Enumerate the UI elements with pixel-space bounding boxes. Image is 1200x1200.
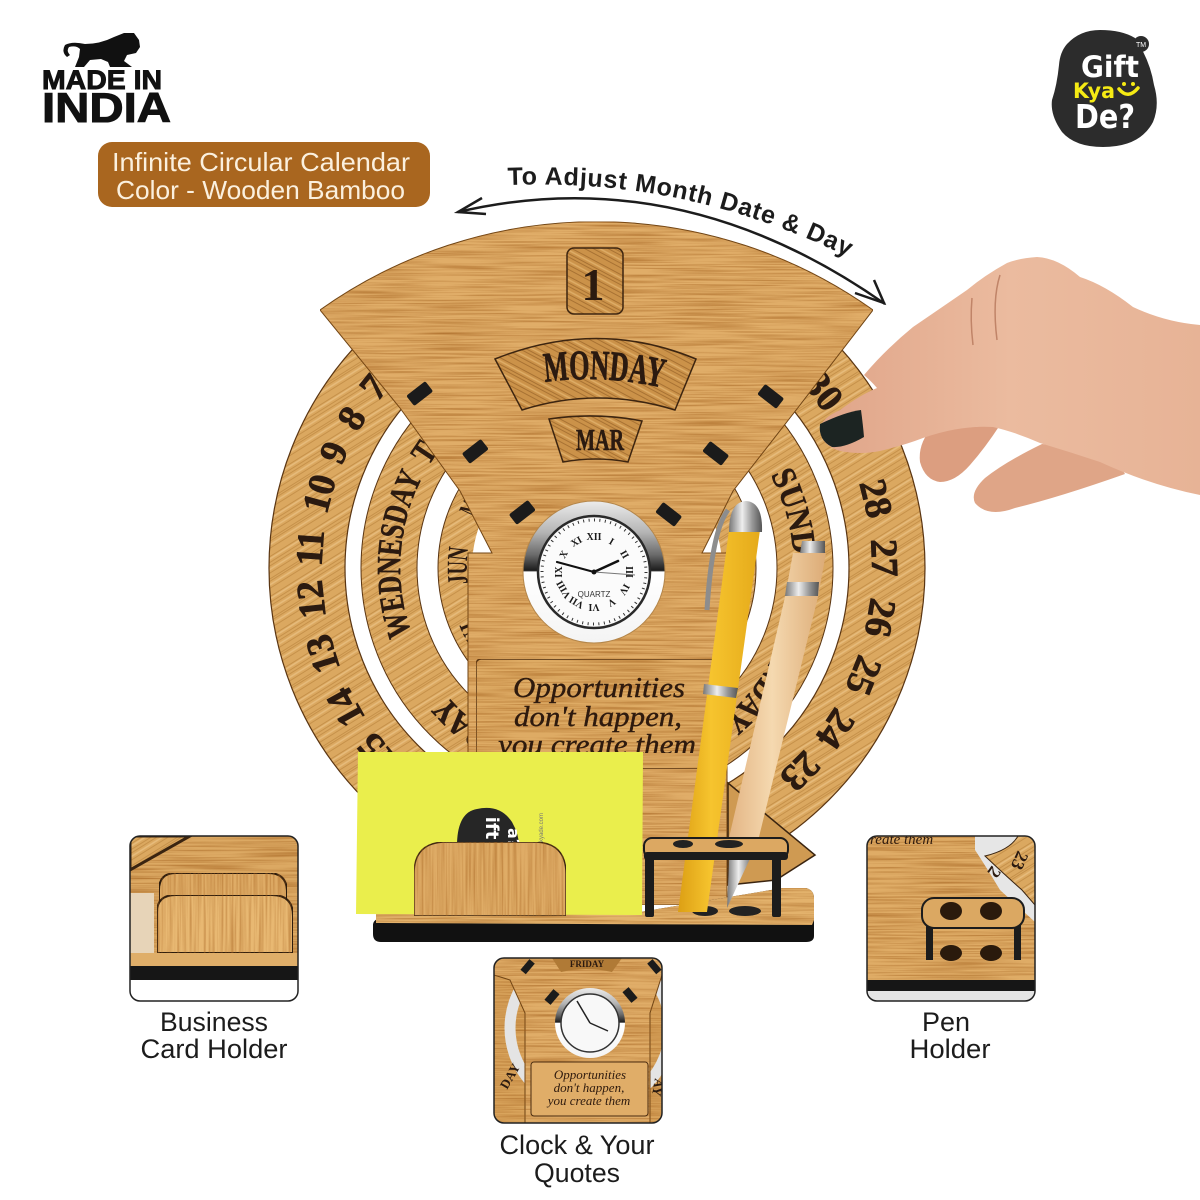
clock: XII [586, 532, 602, 543]
product title badge: Infinite Circular Calendar [112, 147, 410, 177]
wooden pen [727, 541, 826, 908]
made in india logo [42, 33, 171, 131]
inset: clock and quotes: Opportunities [554, 1067, 626, 1082]
weekday window [494, 338, 697, 411]
ring finger [974, 444, 1125, 512]
yellow business card [356, 752, 643, 915]
india text: INDIA [42, 84, 171, 131]
lower right ring support wedge [728, 783, 815, 885]
brand logo: Gift Kya De: TM [1136, 42, 1146, 49]
card holder front [414, 842, 566, 916]
clock: VI [588, 601, 600, 612]
clock: IX [554, 566, 565, 578]
calendar outer date ring: 24 [807, 701, 863, 756]
black pegs [406, 381, 784, 527]
month window [549, 416, 642, 462]
label: pen holder [910, 1007, 990, 1064]
calendar inner month ring: MAY [459, 500, 472, 515]
label: business card holder: Business [160, 1007, 268, 1037]
hand turning the calendar [820, 257, 1200, 512]
calendar outer date ring: 28 [851, 475, 900, 522]
calendar outer date ring: 30 [795, 363, 851, 419]
calendar outer date ring: 23 [772, 743, 828, 799]
calendar middle weekday ring: TUESDAY [430, 699, 468, 744]
pen tray [644, 838, 788, 917]
calendar outer date ring: 13 [297, 629, 349, 678]
date window [567, 248, 623, 314]
inset: clock and quotes [494, 948, 670, 1123]
label: clock and quotes [500, 1130, 655, 1188]
clock: VII [567, 593, 586, 610]
label: clock and quotes: Quotes [534, 1158, 620, 1188]
calendar outer date ring: 12 [289, 578, 335, 621]
product title badge [98, 142, 430, 207]
calendar outer date ring [269, 240, 925, 896]
clock [523, 501, 665, 643]
brand logo: Gift Kya De: Gift [1081, 50, 1139, 84]
calendar middle weekday ring: SUNDAY [772, 468, 814, 552]
yellow business card: giftkyade.com [539, 813, 545, 850]
front wooden fan and clock body [320, 222, 873, 905]
quote plaque [476, 659, 716, 769]
inset: pen holder [867, 832, 1035, 1001]
calendar outer date ring: 8 [329, 399, 375, 438]
brand logo: Gift Kya De [1052, 30, 1157, 147]
yellow pen [678, 501, 762, 912]
clock: X [558, 548, 571, 561]
calendar outer date ring: 11 [288, 529, 333, 567]
label: pen holder: Pen [922, 1007, 970, 1037]
calendar inner month ring: JUL [459, 624, 468, 642]
inset: pen holder: 2 [984, 863, 1005, 882]
label: business card holder [140, 1007, 288, 1064]
inset: pen holder: 23 [1007, 848, 1033, 873]
clock: II [617, 549, 631, 561]
calendar outer date ring: 14 [318, 680, 374, 734]
inset: clock and quotes: don't happen, [554, 1080, 624, 1095]
yellow business card: ift [481, 817, 502, 840]
calendar middle weekday ring: THURSDAY [410, 438, 435, 463]
date window: 1 [582, 259, 604, 310]
brand logo: Gift Kya De: De? [1075, 97, 1135, 136]
clock: QUARTZ [578, 590, 610, 599]
calendar middle weekday ring [360, 422, 834, 766]
brand logo: Gift Kya De: Kya [1073, 79, 1115, 103]
label: business card holder: Card Holder [140, 1034, 288, 1064]
calendar middle weekday ring: WEDNESDAY [378, 468, 421, 640]
calendar outer date ring: 9 [311, 436, 357, 470]
quote plaque: you create them [495, 729, 696, 761]
yellow business card: a? [504, 828, 523, 848]
black nail polish [820, 410, 864, 447]
weekday window: MONDAY [542, 351, 668, 387]
clock: IV [616, 582, 631, 597]
adjust arrow with caption: To Adjust Month Date & Day [508, 167, 854, 258]
card logo [457, 808, 519, 850]
inset: business card holder [130, 836, 298, 1001]
calendar outer date ring: 26 [856, 595, 904, 640]
calendar outer date ring: 7 [352, 367, 396, 408]
adjust arrow with caption [454, 167, 886, 306]
icon: lion [63, 33, 140, 67]
quote plaque: Opportunities [513, 672, 685, 704]
calendar outer date ring: 27 [862, 538, 905, 578]
clock: VIII [555, 578, 574, 600]
inset: clock and quotes: DAY [497, 1060, 523, 1092]
quote plaque: don't happen, [514, 701, 682, 733]
clock: XI [569, 535, 584, 550]
calendar outer date ring: 15 [349, 724, 405, 781]
base plate [373, 888, 814, 942]
calendar inner month ring: JUN [448, 546, 468, 584]
hand back and thumb [820, 257, 1200, 495]
calendar middle weekday ring: MONDAY [734, 662, 770, 736]
inset: clock and quotes: FRIDAY [570, 959, 605, 969]
month window: MAR [576, 422, 624, 457]
middle finger [920, 425, 1000, 482]
inset: clock and quotes: AY [649, 1077, 667, 1098]
label: clock and quotes: Clock & Your [500, 1130, 655, 1160]
clock: III [623, 566, 634, 578]
product title badge: Color - Wooden Bamboo [116, 175, 405, 205]
label: pen holder: Holder [910, 1034, 990, 1064]
clock: I [607, 536, 616, 548]
made in text: MADE IN [42, 65, 162, 95]
calendar outer date ring: 25 [837, 650, 890, 701]
clock: V [605, 595, 617, 609]
calendar outer date ring: 10 [295, 470, 345, 518]
inset: clock and quotes: you create them [546, 1093, 630, 1108]
inset: pen holder: reate them [870, 832, 933, 848]
calendar inner month ring [438, 488, 756, 661]
